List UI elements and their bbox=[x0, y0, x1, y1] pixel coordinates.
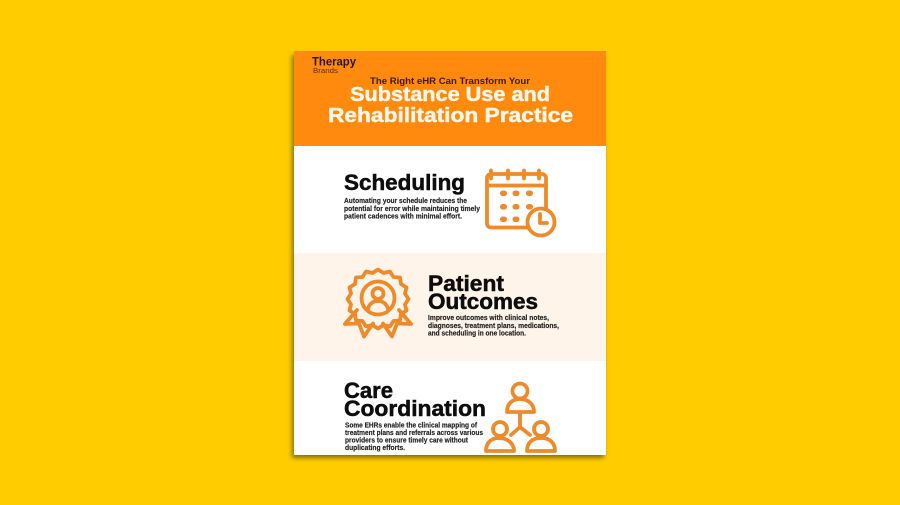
text: scheduling description bbox=[344, 198, 480, 220]
icon: award badge with person bbox=[345, 270, 411, 336]
text: patient outcomes description: diagnoses, treatment plans, medications, bbox=[428, 323, 559, 330]
logo: Therapy Brands bbox=[312, 56, 357, 75]
heading: Patient Outcomes: Patient bbox=[428, 271, 505, 296]
heading: Care Coordination: Care bbox=[344, 378, 393, 403]
text: patient outcomes description bbox=[428, 315, 559, 338]
main title: Substance Use and bbox=[350, 84, 550, 106]
card shadow bbox=[292, 55, 604, 458]
panel: care coordination bbox=[294, 361, 606, 455]
icon: connected people bbox=[486, 384, 555, 451]
logo: Therapy Brands: Brands bbox=[313, 66, 338, 75]
icon: calendar with clock bbox=[487, 170, 554, 236]
text: scheduling description: patient cadences with minimal effort. bbox=[344, 214, 462, 220]
main title bbox=[328, 84, 573, 127]
panel: patient outcomes bbox=[294, 253, 606, 361]
heading: Patient Outcomes: Outcomes bbox=[428, 289, 538, 314]
main title: Rehabilitation Practice bbox=[328, 105, 573, 127]
heading: Care Coordination: Coordination bbox=[344, 396, 486, 421]
text: scheduling description: potential for error while maintaining timely bbox=[344, 206, 480, 213]
heading: Care Coordination bbox=[344, 378, 486, 421]
text: care coordination description bbox=[345, 422, 483, 452]
panel: header bbox=[294, 51, 606, 146]
panel: scheduling bbox=[294, 146, 606, 253]
heading: Scheduling: Scheduling bbox=[344, 170, 465, 195]
infographic card bbox=[294, 51, 606, 455]
text: scheduling description: Automating your schedule reduces the bbox=[344, 198, 467, 205]
text: care coordination description: providers to ensure timely care without bbox=[345, 438, 469, 444]
text: patient outcomes description: Improve outcomes with clinical notes, bbox=[428, 315, 549, 322]
text: care coordination description: Some EHRs enable the clinical mapping of bbox=[345, 422, 478, 430]
heading: Patient Outcomes bbox=[428, 271, 538, 314]
text: care coordination description: treatment plans and referrals across various bbox=[345, 430, 483, 437]
intro line: The Right eHR Can Transform Your bbox=[370, 76, 530, 87]
logo: Therapy Brands: Therapy bbox=[312, 56, 357, 68]
text: patient outcomes description: and scheduling in one location. bbox=[428, 330, 526, 338]
text: care coordination description: duplicating efforts. bbox=[345, 445, 405, 452]
